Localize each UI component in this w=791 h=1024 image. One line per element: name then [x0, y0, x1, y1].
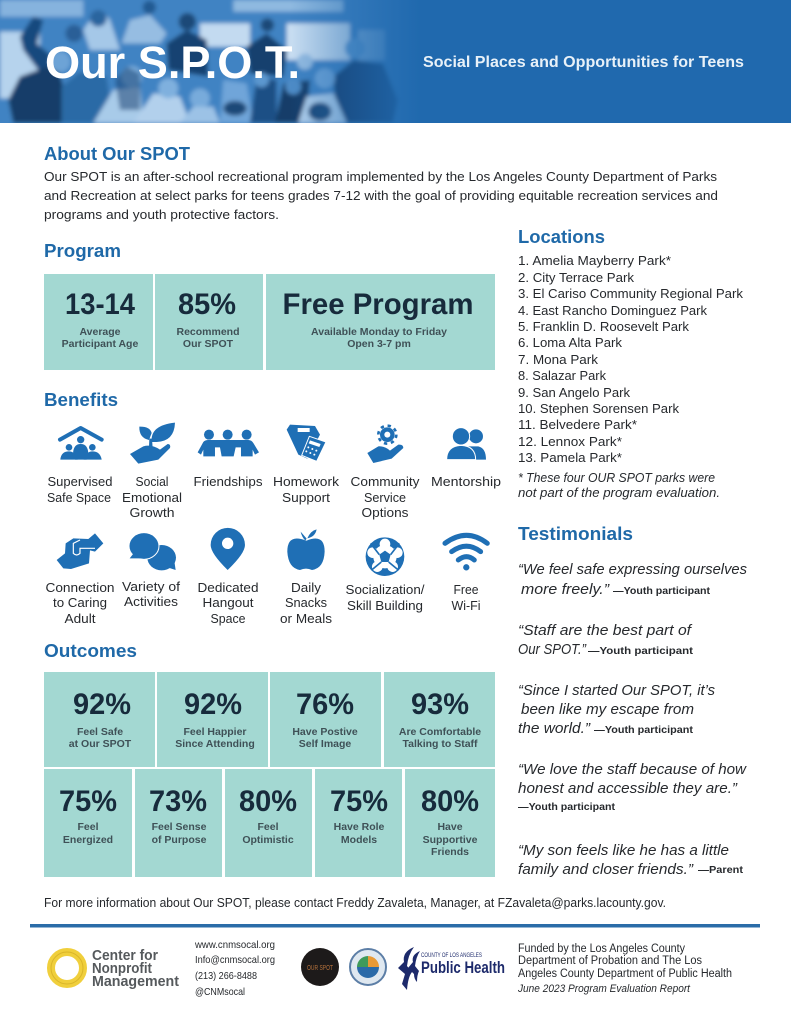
logo: center for nonprofit management [51, 948, 179, 990]
benefit labels row 2: Hangout [202, 595, 254, 610]
testimonial 5: family and closer friends.” [518, 861, 694, 878]
benefit labels row 1: Social [136, 474, 169, 489]
locations list: 12. Lennox Park* [518, 434, 622, 449]
outcome: energized: Feel [77, 821, 99, 833]
about text: Our SPOT is an after-school recreational program implemented by the Los Angeles County Department of Parks [44, 169, 717, 184]
funding note: Angeles County Department of Public Health [518, 968, 732, 980]
logo: public health: COUNTY OF LOS ANGELES [421, 953, 482, 959]
outcome: comfortable talking: Talking to Staff [402, 738, 478, 750]
funding note: Funded by the Los Angeles County [518, 943, 685, 955]
testimonial 4: “We love the staff because of how [518, 761, 747, 778]
icon: mentorship [447, 428, 486, 460]
stat: participant age [44, 274, 153, 370]
outcome: self image [270, 672, 381, 767]
locations list: 6. Loma Alta Park [518, 335, 622, 350]
locations list: 4. East Rancho Dominguez Park [518, 303, 707, 318]
locations list: 7. Mona Park [518, 352, 598, 367]
outcome: energized [44, 769, 132, 877]
funding note: Department of Probation and The Los [518, 955, 702, 967]
funding note [517, 943, 732, 995]
about section [44, 144, 718, 222]
contact details: @CNMsocal [195, 986, 245, 998]
outcome: comfortable talking [384, 672, 495, 767]
outcome: supportive friends: Have [437, 821, 463, 833]
testimonial 5: “My son feels like he has a little [518, 842, 729, 859]
benefit labels row 2: Activities [124, 594, 178, 609]
logo: public health: Public Health [421, 958, 505, 977]
icon: community service [367, 426, 403, 463]
outcome: self image: 76% [296, 688, 354, 721]
outcome: optimistic [225, 769, 312, 877]
logo: our spot: OUR SPOT [307, 965, 334, 972]
outcome: supportive friends: 80% [421, 785, 479, 818]
benefit labels row 2: Adult [64, 611, 96, 626]
testimonial 2: Our SPOT.” [518, 641, 587, 658]
benefit labels row 1 [47, 474, 501, 520]
testimonial 1: “We feel safe expressing ourselves [518, 561, 747, 578]
benefit labels row 1: Growth [130, 505, 174, 520]
benefit labels row 2: Space [210, 611, 246, 626]
benefit labels row 1: Service [364, 490, 406, 505]
footer [51, 939, 732, 998]
outcome: comfortable talking: 93% [411, 688, 469, 721]
locations list: 2. City Terrace Park [518, 270, 634, 285]
outcome: feel happier: 92% [184, 688, 242, 721]
stat: free program: Free Program [282, 288, 474, 321]
benefit labels row 2: to Caring [53, 595, 107, 610]
logo: our spot [301, 948, 339, 986]
testimonials section [518, 524, 747, 878]
testimonial 3: been like my escape from [521, 701, 694, 718]
outcome: role models [315, 769, 402, 877]
outcome: feel safe: Feel Safe [77, 726, 123, 738]
benefit labels row 1: Options [362, 505, 409, 520]
icon: variety of activities [129, 533, 176, 570]
outcomes section [44, 641, 495, 877]
benefit labels row 2: Free [454, 582, 478, 597]
locations list: 11. Belvedere Park* [518, 417, 637, 432]
header banner [0, 0, 791, 133]
outcome: energized: Energized [63, 834, 113, 846]
benefit labels row 2 [46, 579, 481, 626]
icon: connection to caring adult [57, 533, 103, 569]
logo: center for nonprofit management: Nonprofit [92, 961, 152, 977]
outcome: supportive friends [405, 769, 495, 877]
outcome: purpose: 73% [149, 785, 207, 818]
stat: recommend: Recommend [176, 326, 240, 338]
outcome: supportive friends: Friends [431, 846, 469, 858]
locations list: 9. San Angelo Park [518, 385, 630, 400]
outcome: purpose: of Purpose [152, 834, 207, 846]
benefit labels row 2: or Meals [280, 611, 332, 626]
icon: wifi [445, 535, 487, 570]
testimonial 1: —Youth participant [613, 585, 710, 597]
testimonial 2 [518, 622, 694, 658]
program heading: Program [44, 241, 121, 261]
outcome: purpose [135, 769, 222, 877]
locations list: 5. Franklin D. Roosevelt Park [518, 319, 689, 334]
testimonial 3: the world.” [518, 720, 591, 737]
testimonial 3 [518, 682, 715, 737]
icon: friendships [198, 430, 259, 456]
logo: center for nonprofit management: Management [92, 974, 179, 990]
benefit labels row 1: Supervised [48, 474, 112, 489]
stat: free program [266, 274, 495, 370]
benefit labels row 2: Variety of [122, 579, 180, 594]
logo: county parks seal [350, 949, 386, 985]
outcome: role models: Models [341, 834, 377, 846]
locations footnote: * These four OUR SPOT parks were [518, 471, 715, 485]
outcome: self image: Have Postive [292, 726, 358, 738]
stat: free program: Available Monday to Friday [311, 326, 447, 338]
outcome: supportive friends: Supportive [423, 834, 478, 846]
benefit labels row 1: Homework [273, 474, 339, 489]
benefit labels row 1: Community [350, 474, 420, 489]
benefit labels row 1: Emotional [122, 490, 182, 505]
benefit labels row 2: Wi-Fi [452, 598, 481, 613]
testimonial 4: honest and accessible they are.” [518, 780, 738, 797]
icon: social emotional growth [130, 423, 175, 464]
stat: recommend: Our SPOT [183, 338, 234, 350]
locations footnote: not part of the program evaluation. [518, 486, 720, 500]
stat: participant age: Participant Age [62, 338, 138, 350]
locations list [518, 253, 743, 465]
testimonial 2: “Staff are the best part of [518, 622, 693, 639]
benefit labels row 2: Skill Building [347, 598, 423, 613]
benefit labels row 2: Dedicated [198, 580, 258, 595]
outcome: optimistic: Optimistic [242, 834, 294, 846]
benefit labels row 2: Socialization/ [346, 582, 425, 597]
outcome: energized: 75% [59, 785, 117, 818]
stat: recommend: 85% [178, 288, 236, 321]
outcomes heading: Outcomes [44, 641, 137, 661]
icon: location pin [211, 528, 245, 570]
logo: public health [398, 947, 505, 990]
outcome: purpose: Feel Sense [152, 821, 207, 833]
outcome: feel safe: 92% [73, 688, 131, 721]
contact details: (213) 266-8488 [195, 970, 257, 982]
outcome: feel happier [157, 672, 268, 767]
testimonial 5 [518, 842, 744, 878]
stat: recommend [155, 274, 263, 370]
outcome: comfortable talking: Are Comfortable [399, 726, 481, 738]
benefit labels row 2: Snacks [285, 595, 327, 610]
testimonial 3: “Since I started Our SPOT, it’s [518, 682, 715, 699]
contact details: www.cnmsocal.org [194, 939, 275, 951]
icon: soccer ball [366, 537, 404, 576]
benefits section [44, 390, 501, 626]
outcome: optimistic: 80% [239, 785, 297, 818]
about heading: About Our SPOT [44, 144, 190, 164]
testimonial 1: more freely.” [521, 581, 610, 598]
icon: supervised safe space [60, 428, 102, 460]
locations list: 10. Stephen Sorensen Park [518, 401, 679, 416]
about text: and Recreation at select parks for teens grades 7-12 with the goal of providing equitable recreation services and [44, 188, 718, 203]
icon: homework support [287, 425, 326, 461]
locations section [518, 227, 743, 500]
contact details [194, 939, 275, 998]
outcome: optimistic: Feel [257, 821, 279, 833]
contact line: For more information about Our SPOT, please contact Freddy Zavaleta, Manager, at FZavaleta@parks.lacounty.gov. [44, 896, 666, 910]
benefit labels row 1: Friendships [194, 474, 263, 489]
testimonial 5: —Parent [698, 864, 744, 876]
locations list: 13. Pamela Park* [518, 450, 622, 465]
stat: free program: Open 3-7 pm [347, 338, 411, 350]
outcome: feel happier: Feel Happier [183, 726, 247, 738]
locations list: 3. El Cariso Community Regional Park [518, 286, 743, 301]
locations footnote [518, 471, 720, 500]
testimonial 2: —Youth participant [588, 645, 694, 657]
benefit labels row 1: Safe Space [47, 490, 111, 505]
locations heading: Locations [518, 227, 605, 247]
benefit labels row 2: Connection [46, 580, 114, 595]
testimonials heading: Testimonials [518, 524, 633, 544]
banner title: Our S.P.O.T. [45, 37, 300, 88]
outcome: feel safe [44, 672, 155, 767]
benefit labels row 1: Support [282, 490, 330, 505]
banner subtitle: Social Places and Opportunities for Teens [423, 54, 744, 71]
outcome: role models: 75% [330, 785, 388, 818]
locations list: 8. Salazar Park [518, 368, 606, 383]
funding note: June 2023 Program Evaluation Report [517, 983, 691, 995]
contact details: Info@cnmsocal.org [195, 954, 275, 966]
banner photo of teens [0, 0, 396, 123]
about text [44, 169, 718, 222]
icon: apple [287, 529, 325, 570]
logo: center for nonprofit management: Center for [92, 948, 158, 964]
benefit labels row 1: Mentorship [431, 474, 501, 489]
outcome: feel safe: at Our SPOT [69, 738, 132, 750]
benefit icons [57, 423, 487, 576]
outcome: feel happier: Since Attending [175, 738, 255, 750]
locations list: 1. Amelia Mayberry Park* [518, 253, 671, 268]
testimonial 4 [518, 761, 747, 813]
benefits heading: Benefits [44, 390, 118, 410]
program section [44, 241, 495, 370]
about text: programs and youth protective factors. [44, 207, 279, 222]
benefit labels row 2: Daily [291, 580, 321, 595]
stat: participant age: 13-14 [65, 288, 135, 321]
outcome: self image: Self Image [299, 738, 351, 750]
testimonial 1 [518, 561, 747, 598]
outcome: role models: Have Role [334, 821, 385, 833]
testimonial 3: —Youth participant [594, 724, 694, 736]
stat: participant age: Average [79, 326, 121, 338]
testimonial 4: —Youth participant [518, 801, 615, 813]
